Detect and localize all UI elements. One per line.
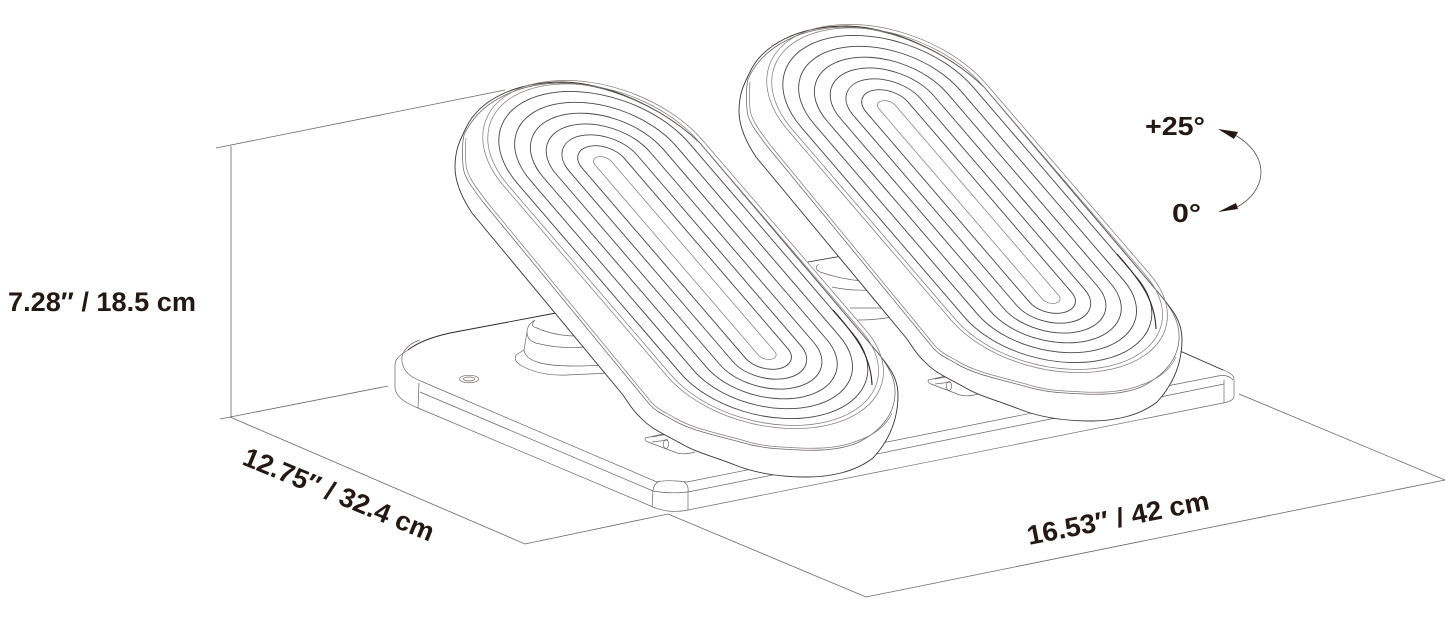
label: depth: 12.75″ / 32.4 cm xyxy=(239,442,439,547)
left hub xyxy=(515,320,610,375)
label: min angle: 0° xyxy=(1172,198,1201,228)
screw hole xyxy=(460,375,478,383)
label: width: 16.53″ / 42 cm xyxy=(1024,486,1212,551)
label: height: 7.28″ / 18.5 cm xyxy=(8,287,196,317)
pedal rim xyxy=(746,27,1179,394)
concentric grooves xyxy=(720,5,1211,392)
right pedal xyxy=(720,5,1211,421)
left pedal xyxy=(436,61,927,477)
tilt arrow xyxy=(1218,129,1261,212)
right latch xyxy=(928,376,978,396)
base plate xyxy=(395,313,1234,511)
left latch xyxy=(645,434,695,454)
groove shading xyxy=(833,310,872,385)
groove shading xyxy=(1117,254,1156,329)
label: max angle: +25° xyxy=(1145,111,1205,141)
pedal body silhouette xyxy=(739,26,1182,421)
pedal body silhouette xyxy=(455,82,898,477)
concentric grooves xyxy=(436,61,927,448)
base plate back edge xyxy=(408,313,1223,370)
base plate outline xyxy=(395,350,1234,511)
right hub xyxy=(808,256,892,320)
pedal rim xyxy=(462,83,895,450)
base plate inner edges xyxy=(402,340,1233,510)
dimension guide lines xyxy=(216,90,1445,597)
